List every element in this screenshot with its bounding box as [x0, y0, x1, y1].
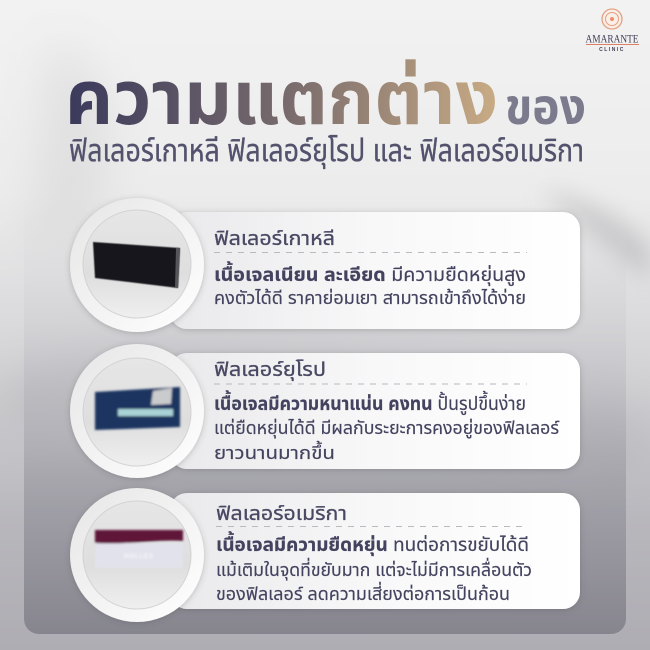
- text: American filler description: ของฟิลเลอร์ ลดความเสี่ยงต่อการเป็นก้อน: [216, 581, 510, 604]
- text: European filler description: [214, 390, 560, 463]
- panel: content backdrop: [24, 190, 626, 634]
- text: European filler description: แต่ยืดหยุ่นได้ดี มีผลกับระยะการคงอยู่ของฟิลเลอร์: [214, 418, 560, 440]
- text: European filler description: ยาวนานมากขึ้น: [214, 440, 335, 463]
- text: Korean filler description: คงตัวได้ดี ราคาย่อมเยา สามารถเข้าถึงได้ง่าย: [214, 288, 526, 308]
- title: ความแตกต่าง: [65, 56, 498, 141]
- text: American filler description: [216, 531, 532, 604]
- heading: American filler: ฟิลเลอร์อเมริกา: [216, 503, 347, 525]
- logo: Amarante Clinic: [586, 9, 639, 53]
- panel: Korean filler card: [170, 212, 580, 329]
- text: American filler description: แม้เติมในจุดที่ขยับมาก แต่จะไม่มีการเคลื่อนตัว: [216, 557, 532, 581]
- logo: Amarante Clinic: CLINIC: [599, 47, 625, 53]
- text: Korean filler description: [214, 261, 526, 308]
- icon: American filler product: [70, 488, 204, 622]
- title: ของ: [505, 79, 586, 135]
- panel: European filler card: [170, 353, 580, 469]
- icon: Korean filler product: [70, 198, 204, 332]
- icon: European filler product: [70, 344, 204, 478]
- heading: European filler: ฟิลเลอร์ยุโรป: [214, 359, 326, 381]
- text: European filler description: เนื้อเจลมีความหนาแน่น คงทน ปั้นรูปขึ้นง่าย: [214, 390, 526, 416]
- text: American filler description: เนื้อเจลมีความยืดหยุ่น ทนต่อการขยับได้ดี: [216, 531, 529, 556]
- heading: Korean filler: ฟิลเลอร์เกาหลี: [214, 228, 335, 250]
- panel: American filler card: [170, 493, 580, 609]
- subtitle: ฟิลเลอร์เกาหลี ฟิลเลอร์ยุโรป และ ฟิลเลอร์อเมริกา: [69, 133, 584, 169]
- icon: American filler product: HOLLEX: [124, 554, 154, 560]
- text: Korean filler description: เนื้อเจลเนียน ละเอียด มีความยืดหยุ่นสูง: [214, 261, 526, 287]
